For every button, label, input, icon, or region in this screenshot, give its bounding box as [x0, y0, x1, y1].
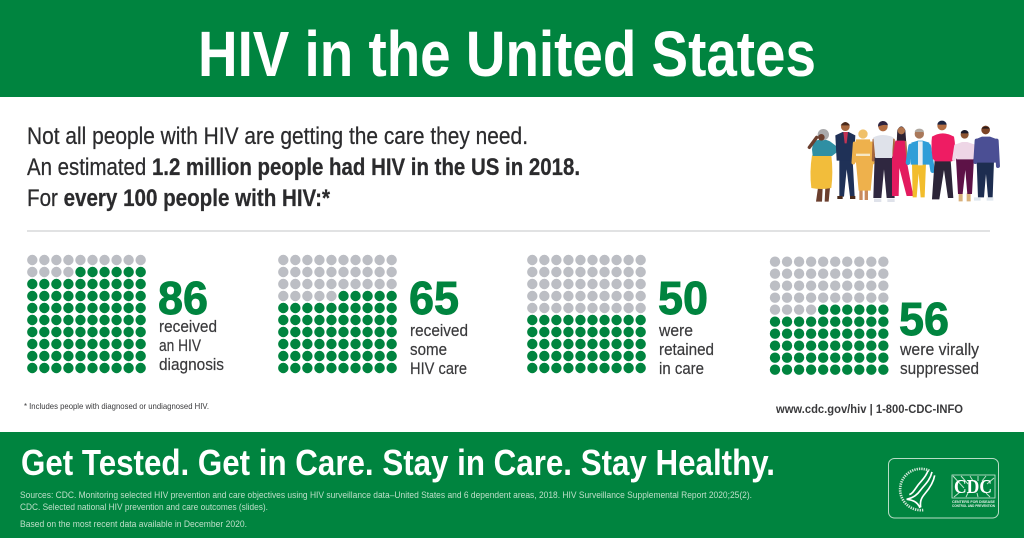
chart panel: 50 were retained in care [532, 260, 714, 378]
dot chart: 56 of 100 [775, 262, 888, 370]
description: received [159, 317, 217, 336]
header banner [0, 0, 1024, 97]
dot chart: 65 of 100 [283, 260, 396, 368]
person 3 [853, 129, 873, 200]
description: retained [659, 340, 714, 359]
person 9 [974, 126, 998, 201]
chart panel: 86 received an HIV diagnosis [32, 260, 224, 374]
icon: CDC logo [952, 475, 996, 508]
description [410, 321, 468, 378]
chart panel: 65 received some HIV care [283, 260, 468, 378]
intro text: An estimated 1.2 million people had HIV in the US in 2018. [27, 154, 580, 181]
description: were [658, 321, 693, 340]
description: HIV care [410, 359, 467, 378]
contact line: www.cdc.gov/hiv | 1-800-CDC-INFO [775, 402, 963, 416]
sources: CDC. Selected national HIV prevention and care outcomes (slides). [20, 502, 268, 513]
dot chart: 50 of 100 [532, 260, 645, 368]
sources: Sources: CDC. Monitoring selected HIV prevention and care objectives using HIV surveillance data–United States and 6 dependent areas, 2018. HIV Surveillance Supplemental Report 2020;25(2). [20, 490, 752, 501]
person 1 [809, 129, 841, 202]
description [658, 321, 714, 378]
icon: HHS seal [900, 469, 935, 510]
person 2 [835, 122, 855, 199]
person 7 [931, 121, 955, 199]
value: 56 [899, 293, 949, 345]
value: 86 [158, 272, 208, 324]
icon: CDC logo: CONTROL AND PREVENTION [952, 504, 995, 508]
footnote: * Includes people with diagnosed or undiagnosed HIV. [24, 401, 209, 411]
intro text: Not all people with HIV are getting the care they need. [27, 123, 528, 150]
icon: CDC logo: CDC [954, 476, 992, 498]
person 8 [954, 130, 975, 201]
illustration: group of diverse people [809, 121, 998, 202]
dot chart: 86 of 100 [32, 260, 145, 368]
description: suppressed [900, 359, 979, 378]
title: HIV in the United States [198, 18, 816, 90]
footer banner [0, 432, 1024, 538]
sources [20, 490, 752, 530]
chart panel: 56 were virally suppressed [775, 262, 979, 378]
logos: HHS and CDC [888, 458, 998, 518]
description: some [410, 340, 447, 359]
description [899, 340, 979, 378]
description: received [410, 321, 468, 340]
description [159, 317, 224, 374]
intro text: For every 100 people with HIV:* [27, 185, 331, 212]
value: 50 [658, 272, 708, 324]
call to action: Get Tested. Get in Care. Stay in Care. Stay Healthy. [21, 442, 775, 483]
icon: CDC logo: CENTERS FOR DISEASE [952, 500, 996, 504]
sources: Based on the most recent data available in December 2020. [20, 519, 247, 530]
person 4 [873, 121, 895, 202]
description: diagnosis [159, 355, 224, 374]
person 6 [908, 129, 933, 197]
description: in care [659, 359, 704, 378]
intro text [27, 123, 580, 212]
description: an HIV [159, 336, 202, 355]
value: 65 [409, 272, 459, 324]
person 5 [892, 126, 913, 196]
description: were virally [899, 340, 979, 359]
